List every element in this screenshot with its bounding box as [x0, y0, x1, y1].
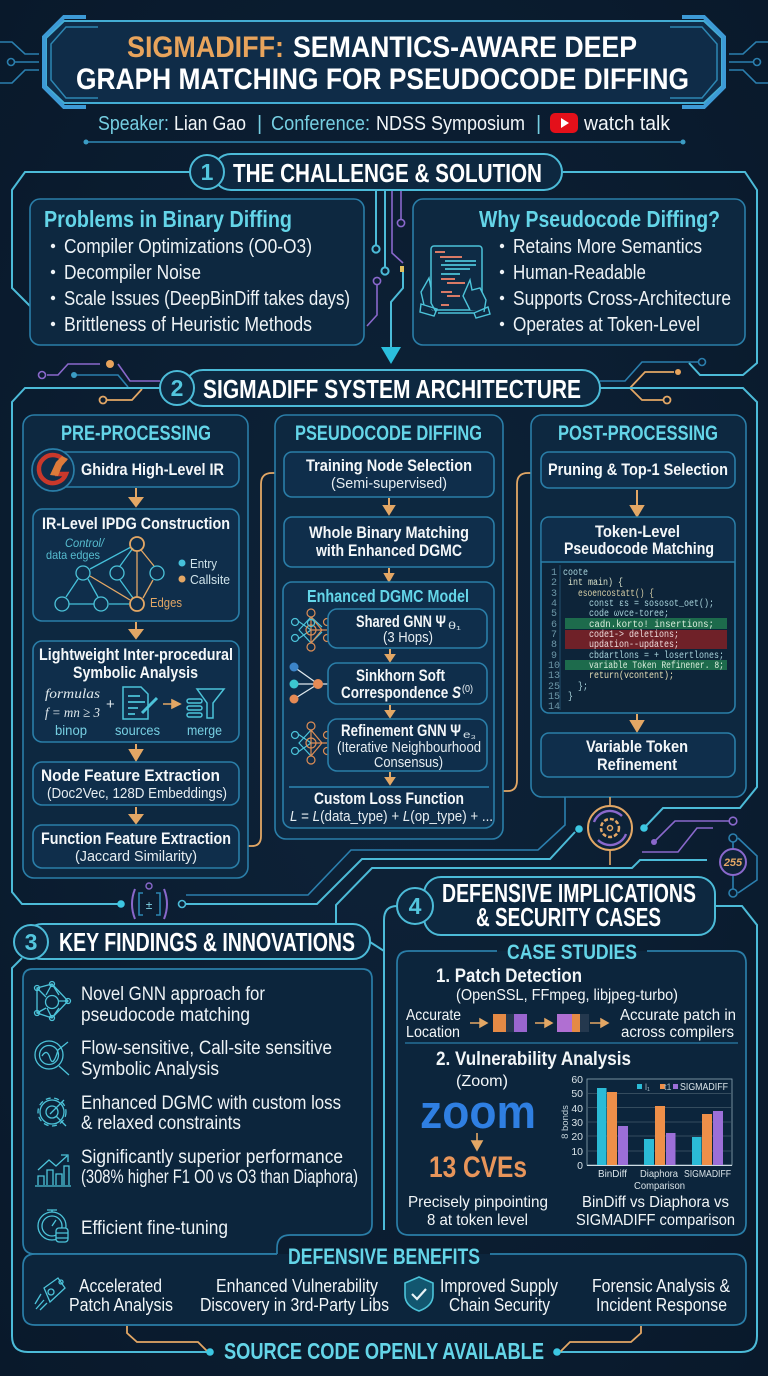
code listing: cbdartlons = + losertlones; — [589, 650, 724, 662]
patch detection: across compilers — [621, 1024, 734, 1041]
bar chart — [560, 1074, 732, 1192]
box: training node selection: (Semi-supervised) — [331, 475, 447, 492]
code listing: 6 — [551, 620, 557, 631]
box: ghidra — [32, 449, 239, 491]
panel: why pseudocode diffing — [413, 199, 745, 345]
icon: youtube — [550, 113, 578, 133]
patch detection: (OpenSSL, FFmpeg, libjpeg-turbo) — [456, 987, 678, 1004]
arrow — [386, 772, 394, 784]
speaker line: | — [257, 113, 262, 135]
panel: problems in binary diffing — [30, 199, 364, 345]
panel: why pseudocode diffing: Supports Cross-Architecture — [513, 288, 731, 310]
panel: enhanced DGMC model: Enhanced DGMC Model — [307, 586, 469, 606]
vulnerability analysis — [408, 1049, 631, 1229]
panel: problems in binary diffing: Scale Issues (DeepBinDiff takes days) — [64, 288, 350, 310]
code listing: int main) { — [568, 577, 623, 589]
code listing: 10 — [548, 661, 560, 672]
box: node feature extraction: (Doc2Vec, 128D Embeddings) — [47, 785, 227, 802]
panel: defensive benefits: Improved Supply — [440, 1276, 558, 1296]
icon: bracket chip — [117, 883, 186, 919]
code listing: return(vcontent); — [589, 670, 674, 682]
panel: key findings: Symbolic Analysis — [81, 1059, 219, 1080]
panel: why pseudocode diffing: Operates at Token-Level — [513, 314, 700, 336]
box: variable token refinement: Variable Token — [586, 738, 688, 756]
frame: section 1 — [12, 172, 757, 375]
code listing: 2 — [551, 578, 557, 589]
bar chart: BinDiff — [598, 1168, 627, 1180]
code listing: code1-> deletions; — [589, 629, 679, 641]
icon: growth chart — [35, 1155, 71, 1186]
bar chart: 10 — [571, 1146, 583, 1158]
panel: defensive benefits: Enhanced Vulnerability — [216, 1276, 378, 1296]
patch detection: Accurate patch in — [620, 1007, 736, 1024]
code listing: updation--updates; — [589, 639, 679, 651]
icon: magnifier — [35, 1041, 69, 1075]
title banner: SIGMADIFF: — [127, 31, 284, 64]
box: shared GNN: Shared GNN Ψ — [356, 613, 446, 631]
circuit traces around section 2 header — [38, 358, 706, 404]
code listing: 14 — [548, 702, 560, 713]
panel: defensive benefits: Patch Analysis — [69, 1295, 173, 1315]
box: refinement GNN: (Iterative Neighbourhood — [337, 739, 481, 756]
bar chart: 40 — [571, 1103, 583, 1115]
code listing: esoencostatt() { — [578, 588, 654, 600]
code listing: coote — [563, 568, 588, 579]
icon: shield — [405, 1277, 433, 1311]
box: sinkhorn: Sinkhorn Soft — [356, 667, 445, 685]
stat: CVEs: 13 CVEs — [429, 1151, 527, 1184]
bar chart: SIGMADIFF — [680, 1082, 728, 1093]
footer: source code available: SOURCE CODE OPENLY AVAILABLE — [224, 1338, 544, 1364]
box: refinement GNN: Consensus) — [374, 754, 443, 771]
icon: gear emblem — [588, 797, 632, 865]
section 1 header — [190, 154, 562, 190]
code listing: 5 — [551, 609, 557, 620]
icon: purple badge: 255 — [723, 857, 743, 869]
patch detection — [406, 966, 736, 1041]
code listing: cadn.korto! insertions; — [589, 619, 714, 631]
box: ghidra: Ghidra High-Level IR — [81, 461, 224, 479]
panel: key findings: Flow-sensitive, Call-site sensitive — [81, 1038, 332, 1059]
panel: problems in binary diffing: Compiler Optimizations (O0-O3) — [64, 236, 312, 258]
box: token-level matching: Token-Level — [595, 523, 680, 541]
icon: document — [123, 687, 157, 719]
box: symbolic analysis: binop — [55, 722, 87, 738]
panel: problems in binary diffing: Decompiler Noise — [64, 262, 201, 284]
frame: section 2 — [12, 388, 757, 904]
panel: defensive benefits: Forensic Analysis & — [592, 1276, 730, 1296]
box: IPDG construction: Entry — [190, 556, 217, 571]
box: pruning: Pruning & Top-1 Selection — [548, 461, 728, 479]
box: pruning — [541, 452, 735, 488]
vulnerability analysis: Precisely pinpointing — [408, 1194, 548, 1211]
box: IPDG construction: Edges — [150, 595, 182, 610]
vulnerability analysis: (Zoom) — [456, 1073, 508, 1090]
box: refinement GNN: e₃ — [463, 730, 476, 741]
speaker line: Lian Gao — [174, 113, 246, 135]
section 4 header: & SECURITY CASES — [476, 902, 661, 932]
footer: source code available — [127, 1326, 641, 1364]
panel: enhanced DGMC model — [283, 582, 494, 828]
circuit traces: header sides — [0, 42, 768, 83]
box: node feature extraction — [33, 762, 239, 805]
panel: case studies — [397, 941, 746, 1235]
box: symbolic analysis: merge — [187, 722, 222, 738]
arrow — [130, 744, 142, 760]
title banner — [44, 17, 724, 107]
speaker line: Conference: — [271, 113, 370, 135]
box: node feature extraction: Node Feature Extraction — [41, 767, 220, 785]
graph — [55, 537, 164, 611]
bar chart: 30 — [571, 1117, 583, 1129]
bar chart: 50 — [571, 1088, 583, 1100]
box: sinkhorn: Correspondence S — [341, 684, 461, 702]
box: function feature extraction: Function Feature Extraction — [41, 830, 231, 848]
frame: sections 3 and 4 — [12, 906, 757, 1352]
bar chart: 0 — [577, 1160, 583, 1172]
code listing: 1 — [551, 568, 557, 579]
panel: defensive benefits — [23, 1244, 746, 1325]
panel: pseudocode diffing: PSEUDOCODE DIFFING — [295, 422, 482, 445]
connector: diffing to post-processing — [503, 473, 535, 791]
arrow — [384, 498, 394, 514]
panel: key findings: pseudocode matching — [81, 1005, 250, 1026]
section 2 header: 2 — [171, 375, 183, 401]
code listing: variable Token Refinener. 8; — [589, 660, 724, 672]
code listing: } — [568, 691, 573, 703]
bar chart: t1 — [664, 1082, 672, 1092]
bar chart: 8 bonds — [560, 1105, 571, 1139]
arrow — [130, 488, 142, 506]
panel: defensive benefits: Discovery in 3rd-Party Libs — [200, 1295, 389, 1315]
box: symbolic analysis: Lightweight Inter-procedural — [39, 646, 233, 664]
icon: bracket chip: ± — [146, 898, 153, 912]
box: symbolic analysis — [33, 641, 239, 742]
code listing: 3 — [551, 589, 557, 600]
box: whole binary matching: Whole Binary Matching — [309, 524, 469, 542]
icon: purple badge — [720, 849, 746, 875]
panel: case studies: CASE STUDIES — [507, 941, 637, 964]
box: whole binary matching — [284, 517, 494, 567]
zoom logo: zoom — [420, 1085, 536, 1138]
box: token-level matching — [541, 517, 735, 713]
arrow — [130, 807, 142, 823]
panel: key findings: Efficient fine-tuning — [81, 1218, 228, 1239]
bar chart: 60 — [571, 1074, 583, 1086]
central wires — [367, 190, 405, 364]
icon: neural network — [292, 609, 330, 651]
box: symbolic analysis: sources — [115, 722, 160, 738]
circuit traces: center bottom — [186, 797, 757, 924]
bar chart: l₁ — [645, 1082, 650, 1092]
box: sinkhorn: (0) — [462, 684, 473, 695]
panel: key findings: Novel GNN approach for — [81, 984, 266, 1005]
panel: defensive benefits: DEFENSIVE BENEFITS — [288, 1244, 480, 1269]
icon: chip — [35, 1278, 65, 1310]
box: symbolic analysis: formulas — [45, 687, 101, 702]
section 4 header: 4 — [409, 893, 422, 919]
code listing: 13 — [548, 671, 560, 682]
icon: gear target — [38, 1098, 66, 1126]
panel: defensive benefits: Chain Security — [449, 1295, 550, 1315]
code listing: 15 — [548, 692, 560, 703]
code listing: 25 — [548, 682, 560, 693]
panel: problems in binary diffing: Brittleness of Heuristic Methods — [64, 314, 312, 336]
box: function feature extraction — [33, 825, 239, 868]
connector: pre-processing to diffing — [248, 473, 280, 846]
box: IPDG construction: Control/ — [65, 536, 106, 550]
box: sinkhorn — [328, 663, 487, 704]
panel: case studies: SIGMADIFF comparison — [576, 1212, 735, 1229]
section 3 header: 3 — [25, 929, 37, 955]
section 4 header — [397, 877, 715, 935]
code listing: 4 — [551, 599, 557, 610]
bar chart: Comparison — [634, 1180, 685, 1192]
patch detection: Accurate — [406, 1007, 461, 1024]
loss function: Custom Loss Function — [314, 790, 464, 808]
arrow — [386, 649, 394, 661]
bar chart: Diaphora — [640, 1168, 678, 1180]
box: IPDG construction — [33, 509, 239, 621]
box: function feature extraction: (Jaccard Similarity) — [75, 848, 197, 865]
speaker line: NDSS Symposium — [376, 113, 525, 135]
panel: pre-processing: PRE-PROCESSING — [61, 422, 211, 445]
panel: why pseudocode diffing: Retains More Semantics — [513, 236, 702, 258]
section 1 header: 1 — [201, 159, 214, 185]
box: whole binary matching: with Enhanced DGMC — [315, 542, 462, 560]
box: shared GNN: (3 Hops) — [383, 629, 433, 646]
panel: defensive benefits: Incident Response — [596, 1295, 727, 1315]
panel: why pseudocode diffing: Why Pseudocode Diffing? — [479, 206, 720, 232]
arrow — [631, 714, 643, 731]
code listing: 7 — [551, 630, 557, 641]
box: symbolic analysis: Symbolic Analysis — [73, 664, 198, 682]
box: symbolic analysis: f = mn ≥ 3 — [45, 706, 100, 721]
box: symbolic analysis: + — [106, 696, 115, 713]
box: IPDG construction: data edges — [46, 548, 100, 562]
code listing — [548, 565, 727, 713]
icon: sinkhorn nodes — [290, 662, 331, 704]
section 3 header — [14, 924, 370, 959]
section 1 header: THE CHALLENGE & SOLUTION — [233, 158, 542, 188]
arrow — [163, 700, 180, 708]
icon: funnel — [187, 689, 224, 718]
panel: pre-processing — [23, 415, 248, 878]
panel: pseudocode diffing — [275, 415, 503, 839]
box: shared GNN — [328, 609, 487, 648]
box: refinement GNN — [328, 719, 487, 771]
icon: document with hands — [420, 246, 490, 318]
box: token-level matching: Pseudocode Matching — [564, 540, 714, 558]
panel: why pseudocode diffing: Human-Readable — [513, 262, 646, 284]
speaker line: Speaker: — [98, 113, 169, 135]
panel: key findings: (308% higher F1 O0 vs O3 than Diaphora) — [81, 1167, 358, 1188]
arrow — [386, 705, 394, 717]
panel: post-processing: POST-PROCESSING — [558, 422, 718, 445]
box: training node selection: Training Node Selection — [306, 457, 472, 475]
box: shared GNN: θ₁ — [448, 621, 462, 632]
arrow — [385, 568, 393, 581]
bar chart: 20 — [571, 1131, 583, 1143]
panel: post-processing — [531, 415, 746, 797]
speaker line: watch talk — [583, 113, 671, 135]
section 2 header — [160, 370, 600, 406]
title banner: SEMANTICS-AWARE DEEP — [293, 31, 637, 64]
icon: stopwatch — [38, 1210, 68, 1242]
code listing: 8 — [551, 640, 557, 651]
section 2 header: SIGMADIFF SYSTEM ARCHITECTURE — [203, 374, 581, 404]
box: variable token refinement — [541, 733, 735, 777]
code listing: code ωvce-toree; — [589, 608, 669, 620]
box: IPDG construction: IR-Level IPDG Construction — [42, 515, 230, 533]
panel: key findings: Significantly superior performance — [81, 1147, 343, 1168]
loss function: L = L(data_type) + L(op_type) + ... — [290, 808, 493, 825]
panel: key findings: & relaxed constraints — [81, 1113, 241, 1134]
title banner: GRAPH MATCHING FOR PSEUDOCODE DIFFING — [76, 63, 689, 96]
code listing: 9 — [551, 651, 557, 662]
arrow — [472, 1133, 482, 1150]
panel: defensive benefits: Accelerated — [79, 1276, 162, 1296]
vulnerability analysis: 8 at token level — [427, 1212, 528, 1229]
box: refinement GNN: Refinement GNN Ψ — [341, 722, 461, 740]
patch detection: 1. Patch Detection — [436, 966, 582, 987]
vulnerability analysis: 2. Vulnerability Analysis — [436, 1049, 631, 1070]
code listing: }; — [578, 681, 588, 693]
icon: GNN network — [34, 982, 70, 1020]
speaker line: | — [536, 113, 541, 135]
patch detection: Location — [406, 1024, 460, 1041]
icon: neural network — [292, 722, 330, 764]
speaker line — [98, 113, 671, 135]
arrow — [130, 622, 142, 638]
code listing: const εs = sososot_oet(); — [589, 598, 714, 610]
box: IPDG construction: Callsite — [190, 572, 230, 587]
box: variable token refinement: Refinement — [597, 756, 677, 774]
panel: key findings — [23, 969, 372, 1254]
loss function — [290, 790, 493, 825]
panel: case studies: BinDiff vs Diaphora vs — [582, 1194, 729, 1211]
panel: problems in binary diffing: Problems in Binary Diffing — [44, 206, 292, 232]
arrow — [631, 490, 643, 516]
section 3 header: KEY FINDINGS & INNOVATIONS — [59, 927, 355, 957]
bar chart: SIGMADIFF — [684, 1168, 731, 1180]
panel: key findings: Enhanced DGMC with custom loss — [81, 1093, 341, 1114]
box: training node selection — [284, 452, 494, 497]
